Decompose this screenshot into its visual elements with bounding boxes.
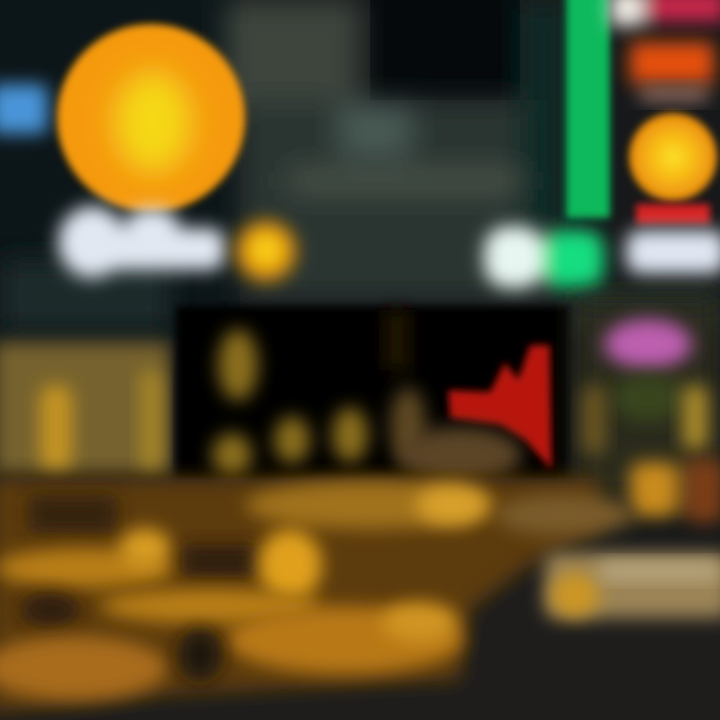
panel: mid-right tan slab <box>495 495 635 535</box>
icon: amber jars <box>630 458 720 523</box>
label: white blurred text left <box>58 206 225 278</box>
coin: bright highlight <box>416 485 488 525</box>
coin: lower left slab <box>0 636 167 700</box>
sign: orange block <box>630 42 714 84</box>
coin: dark gap lower <box>178 629 222 681</box>
icon: small gold coin <box>236 221 296 281</box>
sign: top white and crimson strip <box>610 0 720 26</box>
coin: small bright slab <box>119 528 171 568</box>
coin: dark gap left <box>20 593 80 627</box>
panel: pale tray bottom right <box>545 552 720 618</box>
bar: gold left bar <box>40 385 72 470</box>
coin: left dark gap <box>28 495 118 533</box>
icon: large gold coin <box>57 24 245 212</box>
bar: vertical green bar <box>566 0 610 218</box>
panel: golden table foreground <box>0 478 720 720</box>
coin: dark gap centre <box>182 545 258 577</box>
sign: pale band <box>640 86 708 102</box>
panel: grey-green building backdrop <box>0 0 720 330</box>
panel: black monitor <box>176 306 570 483</box>
panel: right signage column <box>610 0 720 274</box>
icon: pink flowers <box>604 319 692 369</box>
icon: blue tag <box>0 84 48 134</box>
label: white and green blurred text <box>484 226 604 288</box>
panel: tan chart board left <box>0 342 170 474</box>
icon: right gold coin <box>629 113 717 201</box>
coin: long diagonal slab <box>100 588 320 624</box>
coin: top centre gold slab <box>245 481 495 529</box>
coin: lower centre slab <box>227 606 463 674</box>
coin: central bright slab <box>258 529 322 601</box>
sign: red band <box>636 204 710 224</box>
bar: gold right bar <box>140 370 162 470</box>
icon: green leaves <box>612 374 684 422</box>
bar: left gold bottle <box>582 385 606 455</box>
chart: red bars <box>448 345 552 470</box>
floor: dark ground <box>0 560 720 720</box>
coin: upper left slab <box>0 548 175 588</box>
label: white blurred text right <box>626 230 720 274</box>
base: tan monitor corner <box>398 427 522 483</box>
chart: gold blurred digits <box>212 310 426 477</box>
table: brown surface <box>0 478 600 712</box>
panel: flowers and bottles right <box>575 300 720 523</box>
bar: gold bottle <box>682 385 708 450</box>
